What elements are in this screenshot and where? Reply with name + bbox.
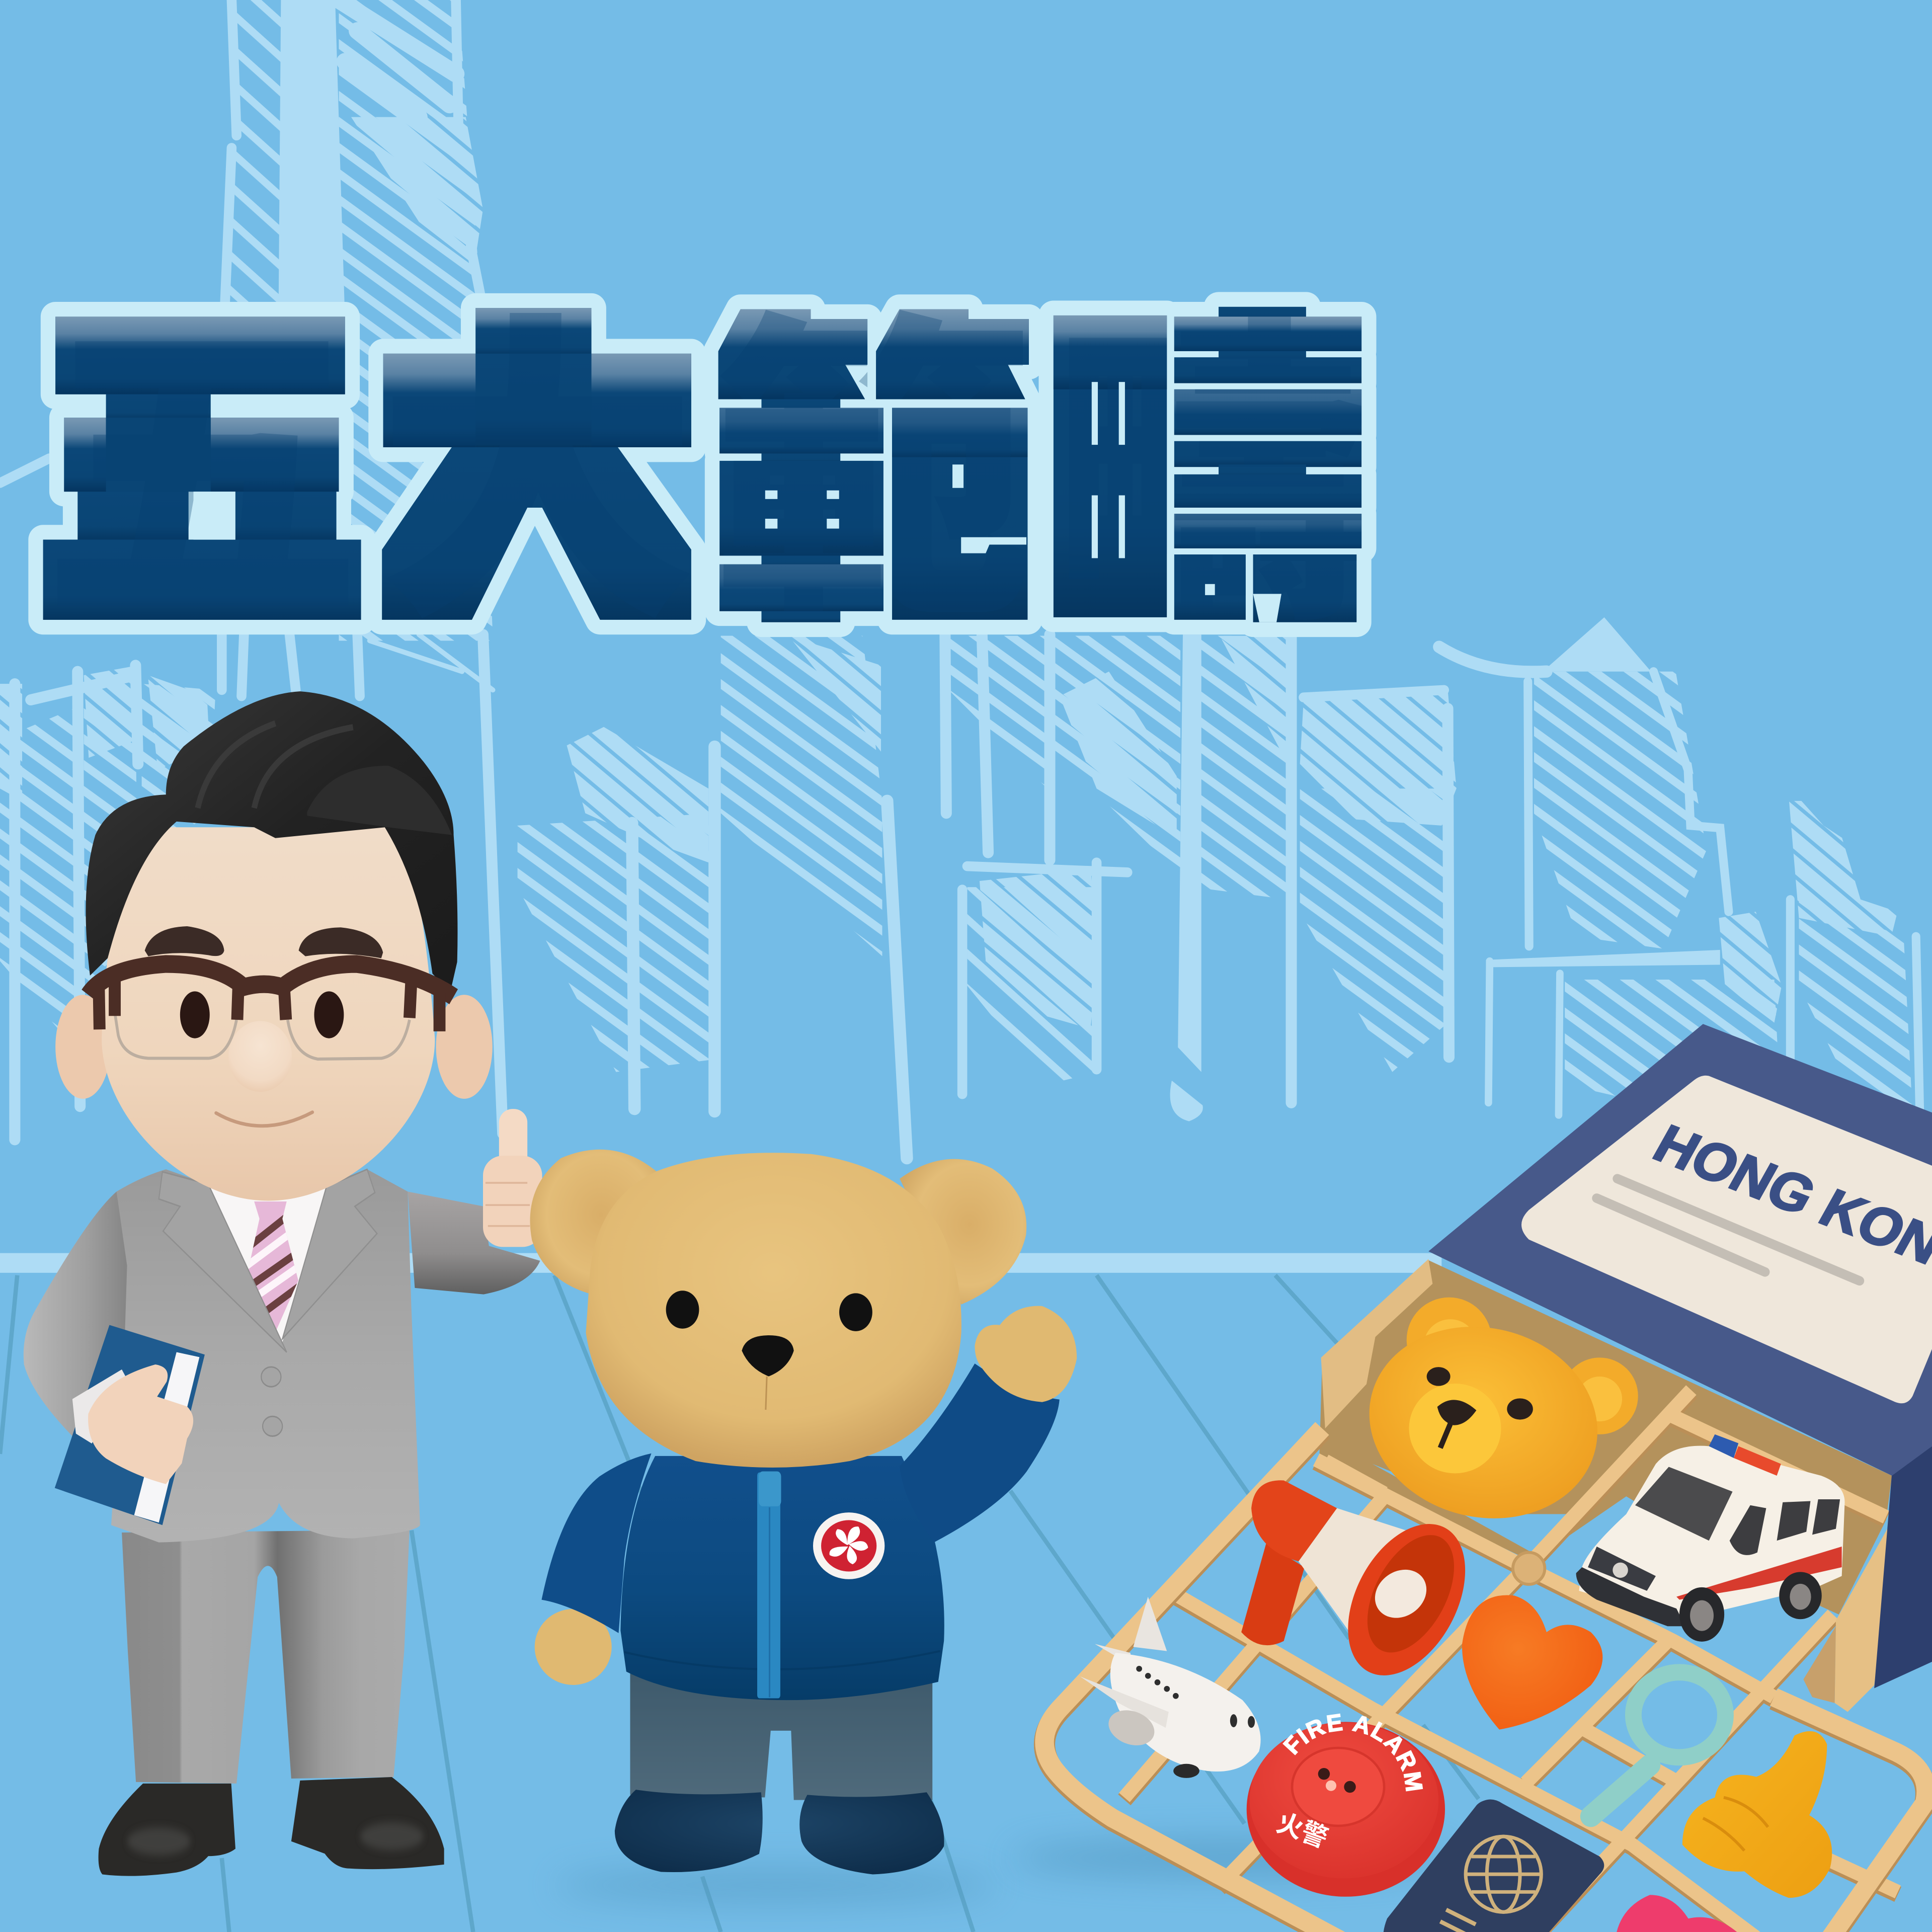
eyes — [180, 991, 344, 1038]
toy: orange heart — [1462, 1595, 1602, 1730]
title lettering: 範 — [711, 297, 1034, 658]
toy: magnifying glass — [1591, 1672, 1725, 1816]
title block fill — [43, 307, 1361, 622]
title slits and notches — [193, 382, 1281, 622]
drawer right wall — [1835, 1526, 1889, 1712]
man head — [55, 691, 493, 1201]
box label — [1521, 1076, 1932, 1403]
thumbs-up hand — [483, 1109, 542, 1247]
shirt and tie — [208, 1184, 327, 1342]
glasses — [88, 964, 454, 1059]
title outline — [43, 307, 1361, 622]
title lettering — [75, 310, 1361, 596]
central tower group — [945, 634, 1292, 1121]
jacket zipper — [757, 1471, 781, 1699]
skyline sketch — [0, 0, 1920, 1158]
bear nose — [742, 1335, 794, 1377]
title lettering: 疇 — [1051, 297, 1374, 658]
shoes — [99, 1777, 444, 1876]
sprue frame — [1044, 1390, 1926, 1932]
floor horizon band — [0, 1253, 1441, 1273]
holding hand — [88, 1364, 193, 1484]
toy: passport — [1383, 1800, 1604, 1932]
box right face — [1874, 1446, 1932, 1688]
title — [41, 297, 1374, 658]
bear ears — [530, 1150, 1026, 1305]
eyebrows — [145, 926, 383, 958]
toy: megaphone — [1241, 1480, 1489, 1695]
bear left hand — [535, 1609, 612, 1685]
bear trousers — [630, 1671, 932, 1800]
title lettering: 五 — [41, 297, 363, 658]
drawer interior — [1319, 1260, 1892, 1615]
bear left sleeve — [541, 1454, 652, 1633]
tall tower behind title — [0, 0, 503, 1134]
fire alarm label: FIRE ALARM — [1278, 1709, 1428, 1794]
right arm — [408, 1191, 540, 1295]
hong kong emblem badge — [813, 1512, 884, 1579]
toy: thumbs-up hand — [1682, 1731, 1832, 1898]
right tower group — [1300, 617, 1920, 1121]
toy: fire alarm button — [1247, 1709, 1445, 1897]
bear shoes — [615, 1790, 944, 1875]
drawer left wall — [1321, 1259, 1432, 1428]
jacket — [111, 1169, 420, 1543]
ears — [55, 995, 493, 1099]
toy box and sprue — [1044, 1024, 1932, 1932]
bear jacket — [620, 1456, 944, 1700]
toy: yellow bear head — [1349, 1298, 1638, 1542]
shirt cuff — [72, 1370, 127, 1443]
bear right sleeve — [900, 1363, 1060, 1542]
lapels — [159, 1169, 377, 1352]
man body — [24, 1169, 540, 1876]
toy: pink heart — [1615, 1895, 1738, 1932]
man character — [24, 691, 542, 1876]
box top face — [1428, 1024, 1932, 1476]
trousers — [122, 1530, 410, 1784]
title block highlights — [43, 308, 1361, 620]
sprue hub — [1513, 1553, 1545, 1584]
bear head — [586, 1153, 961, 1468]
fire alarm chinese label: 火警 — [1272, 1802, 1334, 1855]
floor gap under bear toy — [1373, 1464, 1567, 1553]
buttons — [261, 1367, 282, 1436]
left arm — [24, 1191, 127, 1436]
floor shadows — [554, 1838, 1454, 1905]
bear mascot — [530, 1150, 1077, 1875]
middle tower group — [518, 636, 907, 1158]
mouth — [216, 1112, 312, 1126]
floor perspective lines — [0, 1275, 1479, 1932]
title lettering: 大 — [376, 297, 699, 658]
hair — [86, 691, 457, 993]
nose — [228, 1021, 292, 1092]
left tower group — [0, 665, 216, 1140]
toy: airplane — [1080, 1597, 1261, 1778]
toy: ambulance — [1576, 1434, 1845, 1642]
bear eyes — [666, 1291, 872, 1331]
face — [102, 827, 435, 1201]
bear waving hand — [975, 1306, 1077, 1402]
book — [55, 1325, 205, 1525]
